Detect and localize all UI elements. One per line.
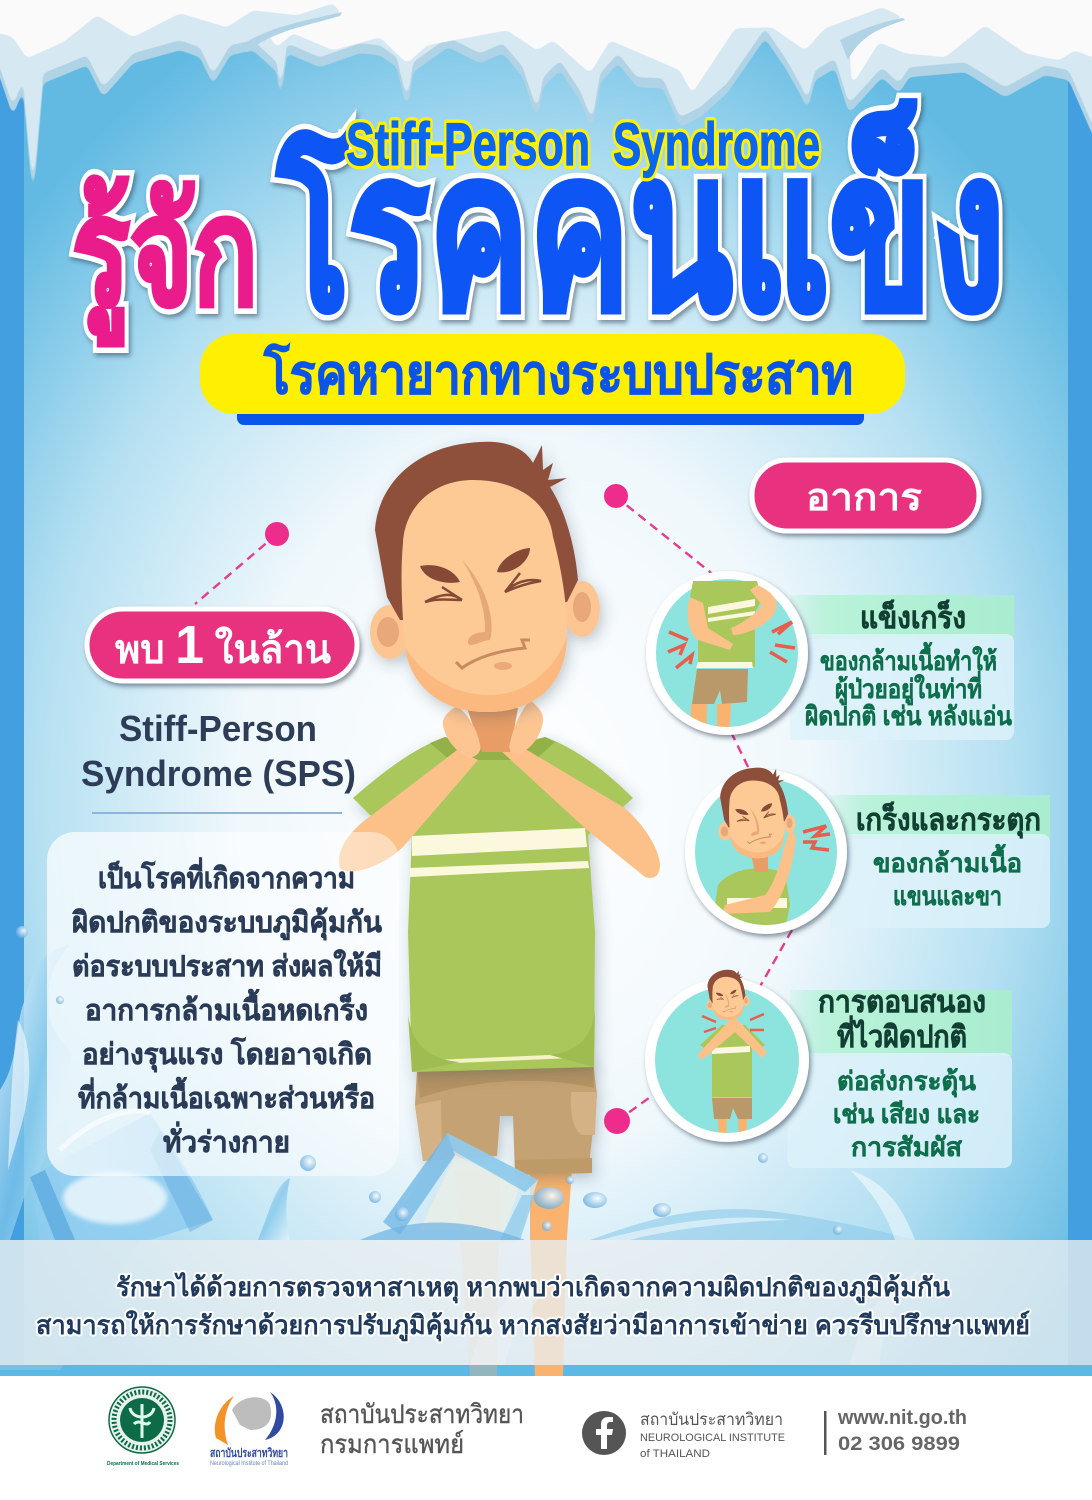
pill: symptoms: อาการ: [806, 477, 923, 519]
footer: [0, 1376, 1092, 1500]
panel: description: ผิดปกติของระบบภูมิคุ้มกัน: [72, 907, 382, 940]
title: know: รู้จัก: [72, 168, 258, 346]
english title: Stiff-Person: [346, 111, 590, 178]
icon: stiff torso circle: [646, 571, 808, 735]
panel: symptom 3: ต่อส่งกระตุ้น: [837, 1066, 976, 1098]
pill: symptoms: [752, 460, 979, 531]
ice cube and water centre: [16, 926, 920, 1365]
logo: neurological institute: [210, 1392, 288, 1467]
sps name: Syndrome (SPS): [81, 753, 356, 794]
head: [370, 442, 600, 712]
shirt: [353, 737, 633, 1072]
panel: symptom 2: แขนและขา: [893, 881, 1002, 911]
subtitle pill: [200, 334, 905, 425]
sps name: [81, 708, 356, 814]
treatment strip: รักษาได้ด้วยการตรวจหาสาเหตุ หากพบว่าเกิดจากความผิดปกติของภูมิคุ้มกัน: [116, 1271, 950, 1304]
ice top: [0, 0, 1092, 200]
facebook page name: of THAILAND: [640, 1448, 710, 1460]
logo: ministry of public health: [107, 1387, 179, 1467]
panel: description: ต่อระบบประสาท ส่งผลให้มี: [72, 949, 382, 983]
website and phone: [837, 1407, 967, 1455]
sps name: Stiff-Person: [119, 708, 317, 749]
english title: Stiff-Person: [346, 111, 590, 178]
panel: symptom 3: [787, 986, 1012, 1168]
logo: neurological institute: Neurological Institute of Thailand: [210, 1461, 288, 1467]
panel: symptom 3: การตอบสนอง: [818, 986, 986, 1019]
treatment strip: [0, 1240, 1092, 1365]
facebook page name: สถาบันประสาทวิทยา: [640, 1410, 783, 1429]
logo: ministry of public health: Department of Medical Services: [107, 1461, 179, 1467]
panel: description: เป็นโรคที่เกิดจากความ: [98, 857, 355, 895]
subtitle pill: โรคหายากทางระบบประสาท: [263, 343, 853, 405]
panel: description: ทั่วร่างกาย: [163, 1121, 290, 1159]
pill: one in a million: [87, 609, 357, 681]
panel: description: อาการกล้ามเนื้อหดเกร็ง: [85, 988, 368, 1027]
website and phone: 02 306 9899: [838, 1434, 960, 1455]
panel: symptom 3: การสัมผัส: [851, 1132, 962, 1162]
logo: neurological institute: สถาบันประสาทวิทยา: [210, 1446, 288, 1460]
panel: description: [47, 832, 399, 1176]
icon: neck spasm circle: [685, 768, 847, 934]
pill: one in a million: พบ 1 ในล้าน: [115, 615, 331, 675]
institute name: กรมการแพทย์: [320, 1429, 464, 1459]
english title: Syndrome: [613, 111, 820, 178]
title: know: รู้จัก: [72, 168, 258, 346]
panel: description: อย่างรุนแรง โดยอาจเกิด: [82, 1036, 372, 1072]
main character: [339, 442, 660, 1376]
facebook page name: [640, 1410, 785, 1460]
connector dots: [265, 484, 630, 1134]
institute name: สถาบันประสาทวิทยา: [320, 1399, 524, 1429]
panel: symptom 3: ที่ไวผิดปกติ: [837, 1015, 967, 1054]
institute name: [320, 1399, 524, 1459]
shorts: [415, 1060, 597, 1175]
panel: description: ที่กล้ามเนื้อเฉพาะส่วนหรือ: [78, 1076, 375, 1115]
icon: facebook: [582, 1411, 626, 1455]
arms and hands: [339, 700, 660, 878]
title: know: [72, 168, 258, 346]
panel: symptom 1: ผิดปกติ เช่น หลังแอ่น: [805, 701, 1012, 731]
icon: reactive figure circle: [645, 970, 809, 1142]
treatment strip: สามารถให้การรักษาด้วยการปรับภูมิคุ้มกัน หากสงสัยว่ามีอาการเข้าข่าย ควรรีบปรึกษาแพทย์: [36, 1310, 1030, 1342]
panel: symptom 2: ของกล้ามเนื้อ: [873, 843, 1022, 878]
water splash left: [0, 945, 290, 1370]
legs: [530, 1170, 572, 1376]
english title: Syndrome: [613, 111, 820, 178]
droplets: [16, 926, 843, 1235]
icicle curls: [235, 12, 342, 52]
website and phone: www.nit.go.th: [837, 1407, 967, 1429]
panel: symptom 1: ผู้ป่วยอยู่ในท่าที่: [835, 670, 982, 706]
panel: symptom 2: เกร็งและกระตุก: [856, 801, 1041, 839]
panel: symptom 3: เช่น เสียง และ: [833, 1099, 980, 1129]
panel: symptom 1: [790, 595, 1014, 740]
panel: symptom 2: [830, 795, 1050, 928]
panel: symptom 1: แข็งเกร็ง: [860, 599, 966, 635]
facebook page name: NEUROLOGICAL INSTITUTE: [640, 1432, 785, 1444]
connector lines: [195, 496, 792, 1121]
panel: symptom 1: ของกล้ามเนื้อทำให้: [820, 641, 997, 676]
